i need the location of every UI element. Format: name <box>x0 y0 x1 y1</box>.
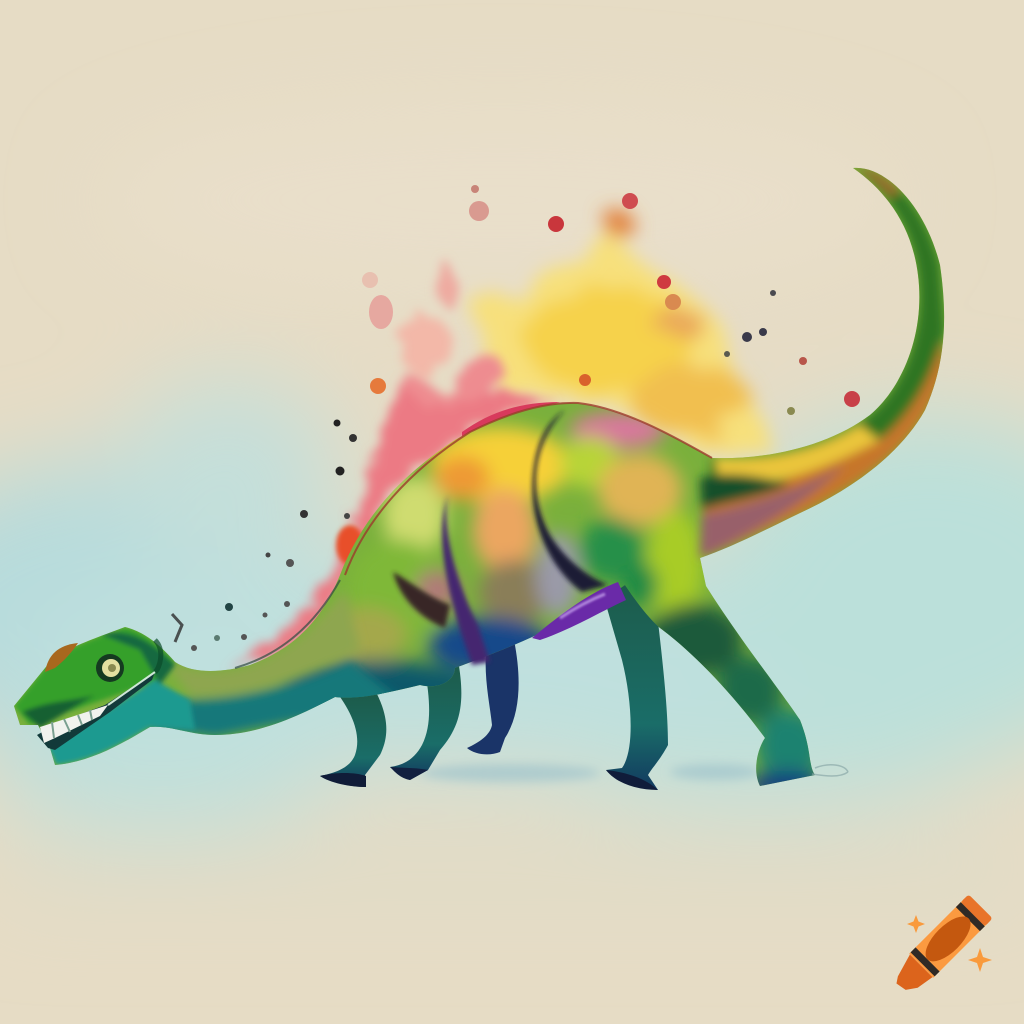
hind foot sketch lines <box>812 765 848 776</box>
sparkle large <box>968 948 992 972</box>
far hind leg <box>596 570 668 790</box>
paint spatter dots <box>172 185 860 651</box>
dinosaur body, tail, neck and head <box>14 168 944 786</box>
tail colour washes <box>700 168 945 558</box>
paint splash: yellow and pink <box>225 211 780 670</box>
head details: crest <box>45 643 78 672</box>
background: pale blue wash <box>0 110 1024 900</box>
ground shadow <box>420 764 760 782</box>
crayon <box>888 894 993 999</box>
head details: eye <box>96 654 124 682</box>
neck colour washes <box>150 590 400 737</box>
sparkle small <box>907 915 925 933</box>
body dark folds and purple belly <box>235 403 712 668</box>
front left leg <box>320 690 386 787</box>
middle far leg <box>467 640 519 754</box>
body colour washes <box>285 412 826 799</box>
head colour washes <box>14 627 195 765</box>
logo: crayon with sparkles <box>888 894 993 999</box>
front right leg <box>390 660 461 780</box>
head details: mouth and teeth <box>37 640 161 750</box>
